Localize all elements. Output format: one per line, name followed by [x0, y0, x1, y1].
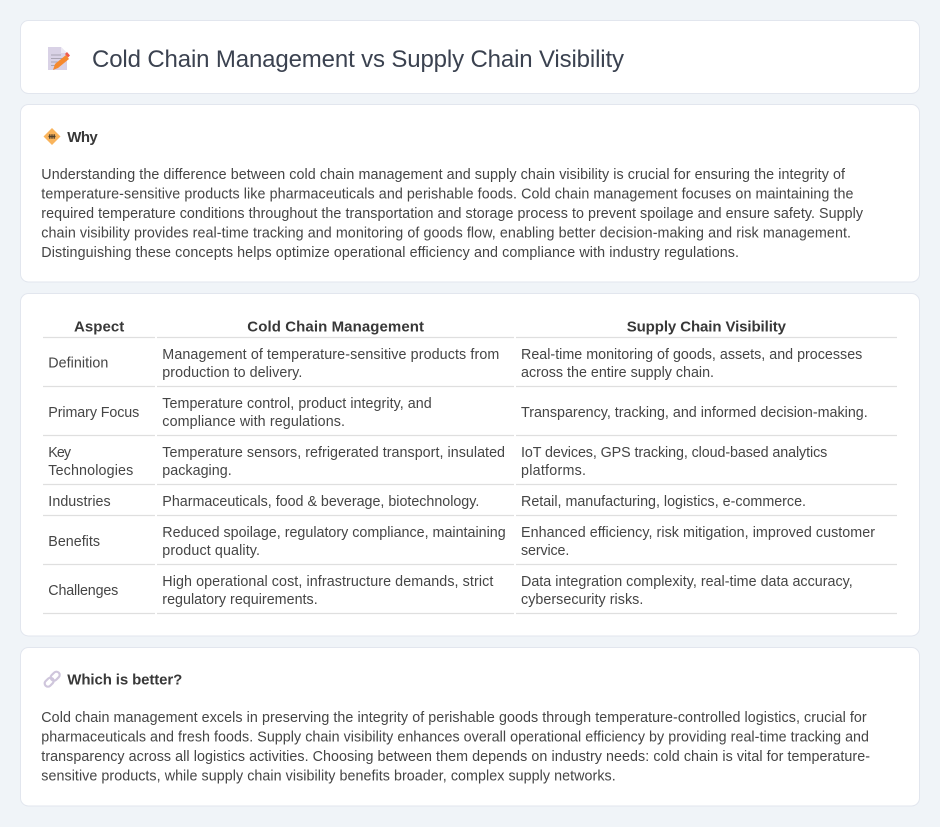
table row: benefits — [48, 525, 875, 559]
table row: key technologies: Temperature sensors, refrigerated transport, insulated — [162, 445, 505, 461]
table row: industries: Industries — [48, 494, 111, 510]
text block: verdict — [41, 710, 870, 784]
table row: key technologies: platforms. — [521, 463, 586, 479]
text block: verdict: pharmaceuticals and fresh foods. Supply chain visibility enhances overall operational efficiency by providing real-time tracking and — [41, 730, 869, 746]
table row: key technologies: Technologies — [48, 463, 133, 479]
table row: definition: Definition — [48, 356, 108, 372]
table row: benefits: Reduced spoilage, regulatory compliance, maintaining — [162, 525, 506, 541]
table row: key technologies: IoT devices, GPS tracking, cloud-based analytics — [521, 445, 827, 461]
table row: definition: across the entire supply chain. — [521, 365, 714, 381]
table header row: Cold Chain Management — [247, 318, 424, 336]
text block: verdict: transparency across all logistics activities. Choosing between them depends on industry needs: cold chain is vital for temperature- — [41, 749, 870, 765]
table row: definition: Management of temperature-sensitive products from — [162, 347, 499, 363]
table row: challenges: cybersecurity risks. — [521, 592, 643, 608]
icon: chain link — [43, 670, 61, 688]
table row: definition: production to delivery. — [162, 365, 302, 381]
table row: challenges — [48, 574, 853, 608]
panel: which is better — [20, 648, 920, 806]
table header row: Aspect — [74, 318, 124, 336]
text block: why explanation — [41, 167, 864, 261]
text block: why explanation: chain visibility provides real-time tracking and monitoring of goods flow, enabling better decision-making and risk management. — [41, 226, 851, 242]
title: Cold Chain Management vs Supply Chain Visibility — [92, 46, 624, 73]
text block: verdict: Cold chain management excels in preserving the integrity of perishable goods through temperature-controlled logistics, crucial for — [41, 710, 867, 726]
table row: benefits: service. — [521, 543, 569, 559]
table row: challenges: Data integration complexity, real-time data accuracy, — [521, 574, 853, 590]
table row: definition: Real-time monitoring of goods, assets, and processes — [521, 347, 862, 363]
table header row: Supply Chain Visibility — [627, 318, 787, 336]
panel: comparison table — [20, 294, 920, 636]
text block: why explanation: Understanding the difference between cold chain management and supply chain visibility is crucial for ensuring the integrity of — [41, 167, 845, 183]
table row: challenges: Challenges — [48, 583, 118, 599]
table row: key technologies: packaging. — [162, 463, 232, 479]
text block: why explanation: temperature-sensitive products like pharmaceuticals and perishable foods. Cold chain management focuses on maintaining the — [41, 186, 854, 202]
table row: definition — [48, 347, 862, 381]
heading: why: Why — [67, 129, 98, 146]
table row: primary focus: compliance with regulations. — [162, 414, 345, 430]
table row: key technologies — [48, 445, 827, 479]
table row: benefits: Enhanced efficiency, risk mitigation, improved customer — [521, 525, 875, 541]
icon: document with pencil — [48, 47, 70, 70]
table row: primary focus: Transparency, tracking, and informed decision-making. — [521, 405, 868, 421]
table header row — [74, 318, 787, 336]
table row: industries: Retail, manufacturing, logistics, e-commerce. — [521, 494, 806, 510]
table row: benefits: product quality. — [162, 543, 260, 559]
icon: warning diamond — [44, 128, 60, 145]
panel: why — [20, 104, 920, 282]
table row: primary focus — [48, 396, 868, 430]
table row: key technologies: Key — [48, 445, 72, 461]
table row: industries — [48, 494, 806, 510]
table row: primary focus: Primary Focus — [48, 405, 139, 421]
panel: title header — [20, 20, 920, 94]
table row: challenges: High operational cost, infrastructure demands, strict — [162, 574, 493, 590]
text block: verdict: sensitive products, while supply chain visibility benefits broader, complex supply networks. — [41, 768, 616, 784]
table row: primary focus: Temperature control, product integrity, and — [162, 396, 432, 412]
text block: why explanation: required temperature conditions throughout the transportation and storage process to prevent spoilage and ensure safety. Supply — [41, 206, 864, 222]
table row: benefits: Benefits — [48, 534, 100, 550]
heading: which is better: Which is better? — [67, 672, 182, 688]
table row: industries: Pharmaceuticals, food & beverage, biotechnology. — [162, 494, 479, 510]
text block: why explanation: Distinguishing these concepts helps optimize operational efficiency and compliance with industry regulations. — [41, 245, 739, 261]
table row: challenges: regulatory requirements. — [162, 592, 318, 608]
